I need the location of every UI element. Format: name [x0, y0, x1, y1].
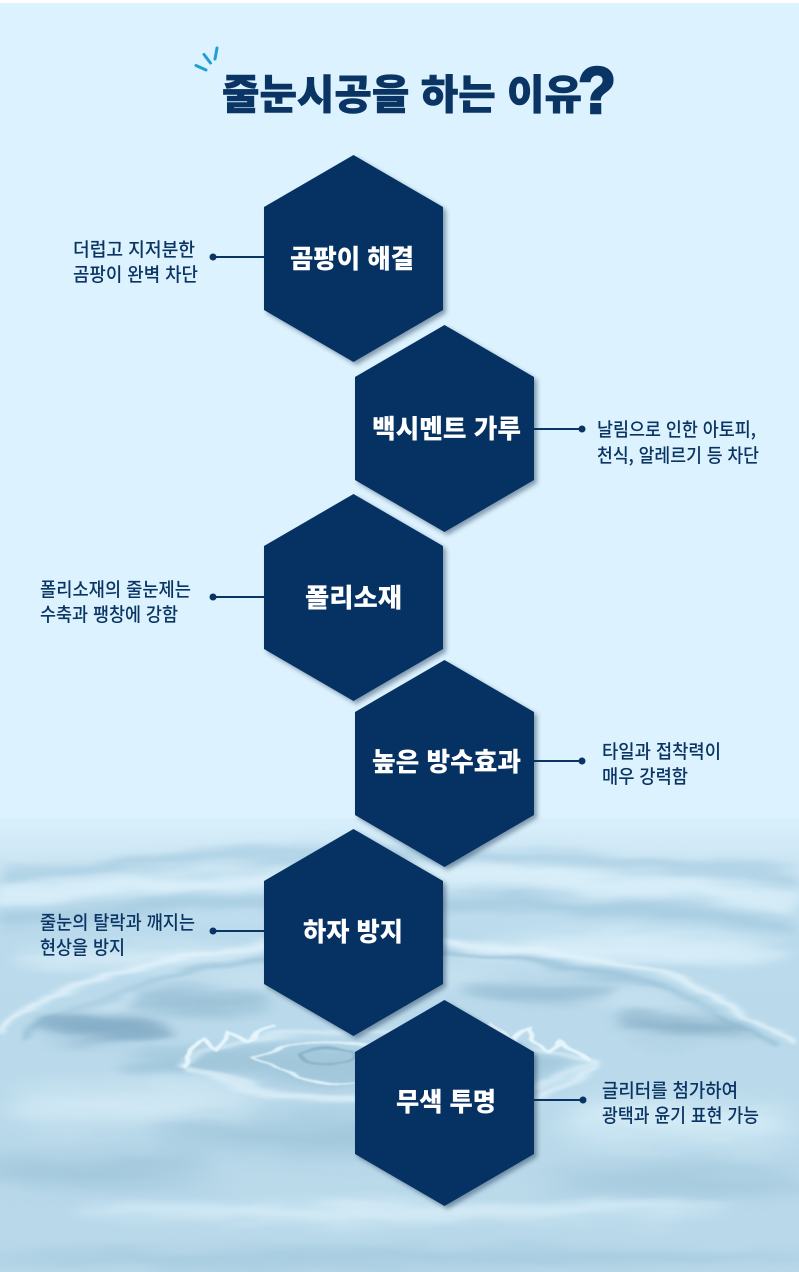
description: 수축과 팽창에 강함 [40, 600, 178, 627]
description: 현상을 방지 [40, 933, 125, 960]
item 4: waterproofing [355, 660, 721, 867]
connector [533, 426, 586, 432]
item 3: polymer material [40, 494, 443, 701]
title [196, 48, 616, 127]
hexagon with label: 높은 방수효과 [372, 742, 521, 779]
hexagon with label [264, 494, 443, 701]
description: 곰팡이 완벽 차단 [73, 260, 198, 287]
description: 줄눈의 탈락과 깨지는 [40, 908, 195, 935]
hexagon with label: 무색 투명 [396, 1082, 496, 1119]
description [40, 575, 191, 627]
description: 더럽고 지저분한 [73, 235, 195, 262]
connector [533, 1096, 586, 1104]
connector [210, 928, 265, 934]
connector [210, 254, 265, 260]
hexagon with label [355, 1000, 534, 1206]
hexagon with label [264, 829, 443, 1036]
description: 천식, 알레르기 등 차단 [597, 441, 759, 468]
item 6: colorless transparent [355, 1000, 759, 1206]
description: 폴리소재의 줄눈제는 [40, 575, 191, 602]
hexagon with label: 백시멘트 가루 [372, 409, 521, 446]
hexagon with label: 폴리소재 [305, 578, 402, 615]
description [602, 737, 721, 789]
hexagon with label [355, 325, 534, 532]
title text: 줄눈시공을 하는 이유 [222, 61, 582, 121]
connector [210, 594, 265, 600]
connector [533, 758, 586, 764]
item 2: white cement powder [355, 325, 759, 532]
description [602, 1076, 759, 1128]
title question mark: ? [578, 53, 616, 127]
hexagon with label: 하자 방지 [303, 912, 403, 949]
item 5: defect prevention [40, 829, 443, 1036]
item 1: mold [73, 155, 443, 362]
description [73, 235, 198, 287]
background: water ripple photo [0, 818, 799, 1272]
hexagon with label [264, 155, 443, 362]
description: 광택과 윤기 표현 가능 [602, 1101, 759, 1128]
hexagon with label [355, 660, 534, 867]
icon: sparkle accent [196, 48, 217, 70]
description [597, 415, 759, 468]
description: 글리터를 첨가하여 [602, 1076, 738, 1103]
hexagon with label: 곰팡이 해결 [290, 239, 414, 276]
description: 타일과 접착력이 [602, 737, 721, 764]
description [40, 908, 195, 960]
description: 날림으로 인한 아토피, [597, 415, 756, 442]
description: 매우 강력함 [602, 762, 688, 789]
